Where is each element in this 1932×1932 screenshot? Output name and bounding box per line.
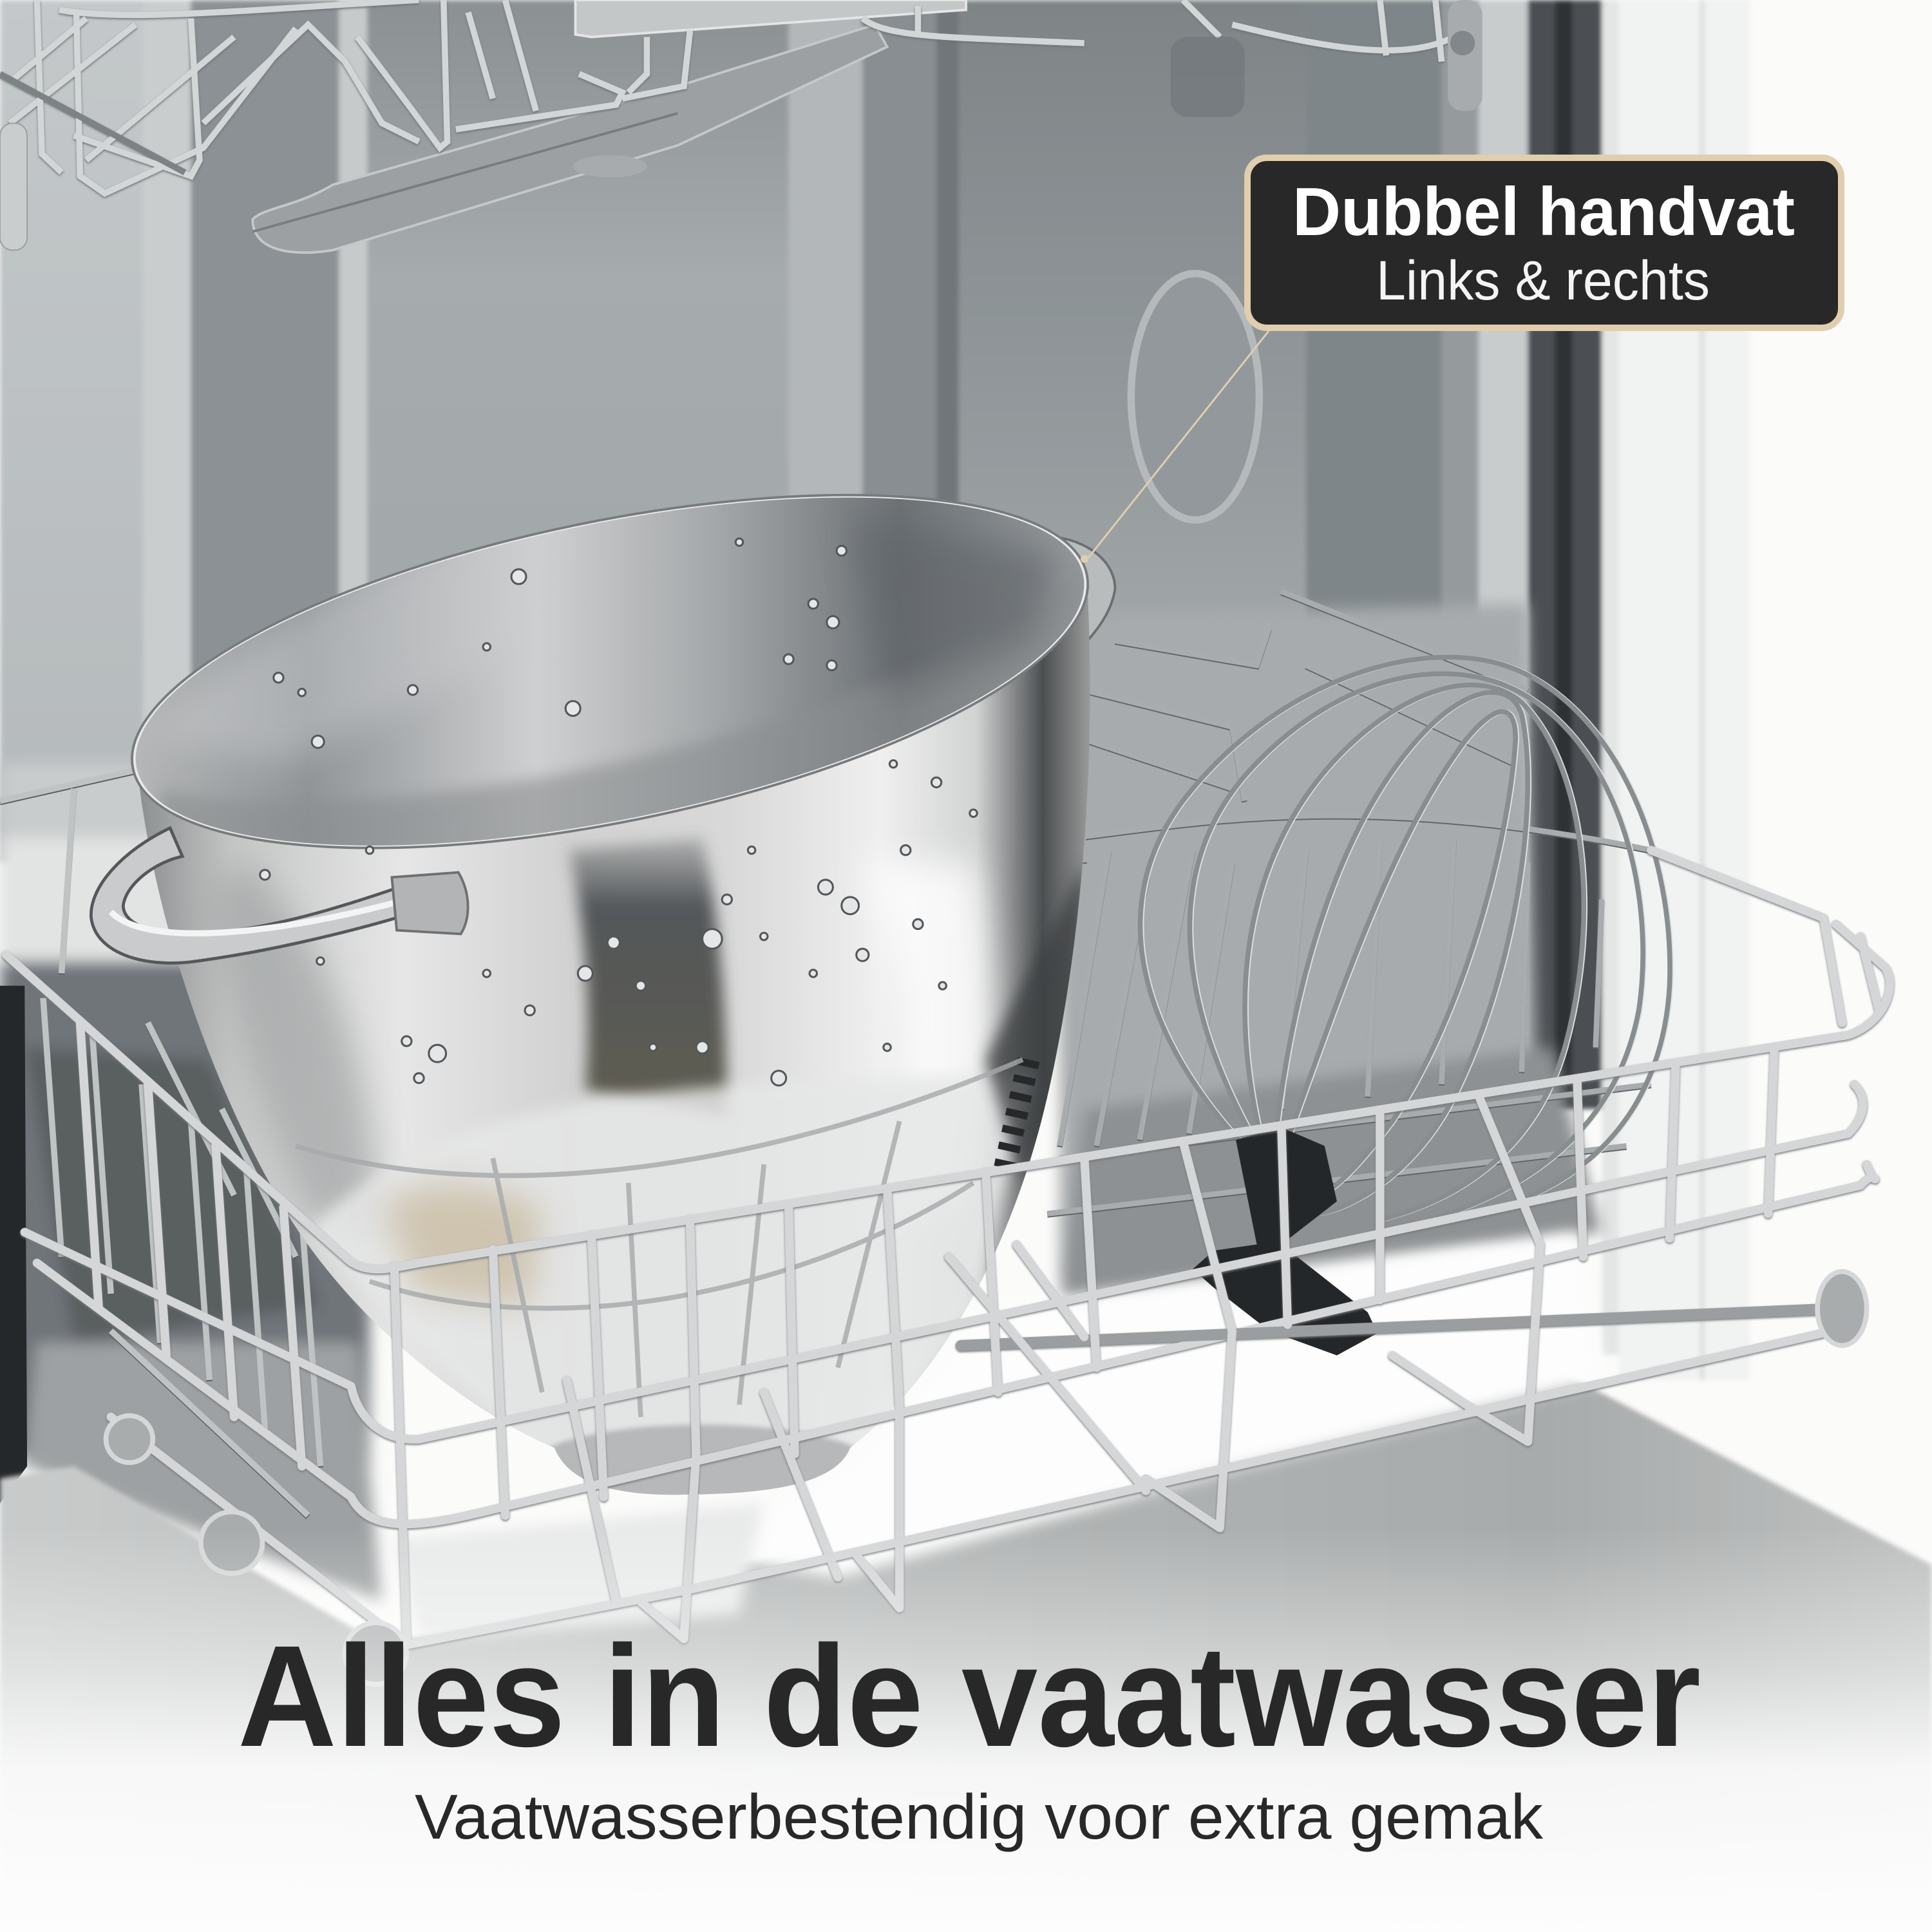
rack axle xyxy=(961,1309,1836,1345)
wire whisk xyxy=(1141,657,1670,1356)
stainless pot xyxy=(91,427,1117,1515)
pot: rack reflection xyxy=(296,1059,1023,1417)
upper basket plate xyxy=(575,0,966,37)
lower interior behind the rack xyxy=(0,604,1602,1602)
pot: outer body xyxy=(139,596,1090,1495)
circular wall detail xyxy=(1131,274,1259,520)
rack lower rail xyxy=(37,1164,1875,1524)
spray arm xyxy=(252,24,887,252)
callout: dubbel handvat xyxy=(1247,158,1841,328)
upper basket wires xyxy=(0,0,1454,193)
lower rack wires xyxy=(6,850,1889,1645)
pot: dark reflection streak xyxy=(569,838,727,1115)
whisk wires xyxy=(1141,657,1670,1220)
pot: water droplets xyxy=(260,538,977,1086)
main title: Alles in de vaatwasser xyxy=(238,1616,1701,1777)
left door edge, black xyxy=(0,986,27,1503)
left basket hook xyxy=(0,123,27,250)
rack bottom rail xyxy=(111,1325,1861,1645)
callout leader line xyxy=(1081,331,1269,563)
background rack tines xyxy=(1047,591,1651,1214)
top-right rack clip xyxy=(1171,0,1482,117)
rack top rail xyxy=(6,924,1889,1269)
stainless door floor xyxy=(0,1374,1932,1932)
rack middle rail xyxy=(24,1084,1863,1439)
rack wheels xyxy=(106,1271,1867,1684)
pot: far handle xyxy=(1023,536,1115,675)
rack side return xyxy=(1651,850,1879,1023)
bottom white fade xyxy=(0,1528,1932,1932)
dishwasher interior walls xyxy=(0,0,1750,1380)
pot: lower bright zone xyxy=(308,1072,1035,1479)
callout heading: Dubbel handvat xyxy=(1293,174,1795,250)
subtitle: Vaatwasserbestendig voor extra gemak xyxy=(415,1781,1544,1852)
whisk hub xyxy=(1193,1128,1378,1356)
rack left tines xyxy=(80,1023,99,1306)
rack lower diagonals xyxy=(1016,1244,1084,1337)
pot: near handle xyxy=(91,828,468,963)
rack front tines xyxy=(394,1265,406,1639)
callout subtext: Links & rechts xyxy=(1376,250,1710,312)
white reflection plate under the rack xyxy=(394,1232,1602,1639)
pot: inner bowl and rim xyxy=(131,493,1089,849)
left rack interior tines xyxy=(0,770,320,1515)
